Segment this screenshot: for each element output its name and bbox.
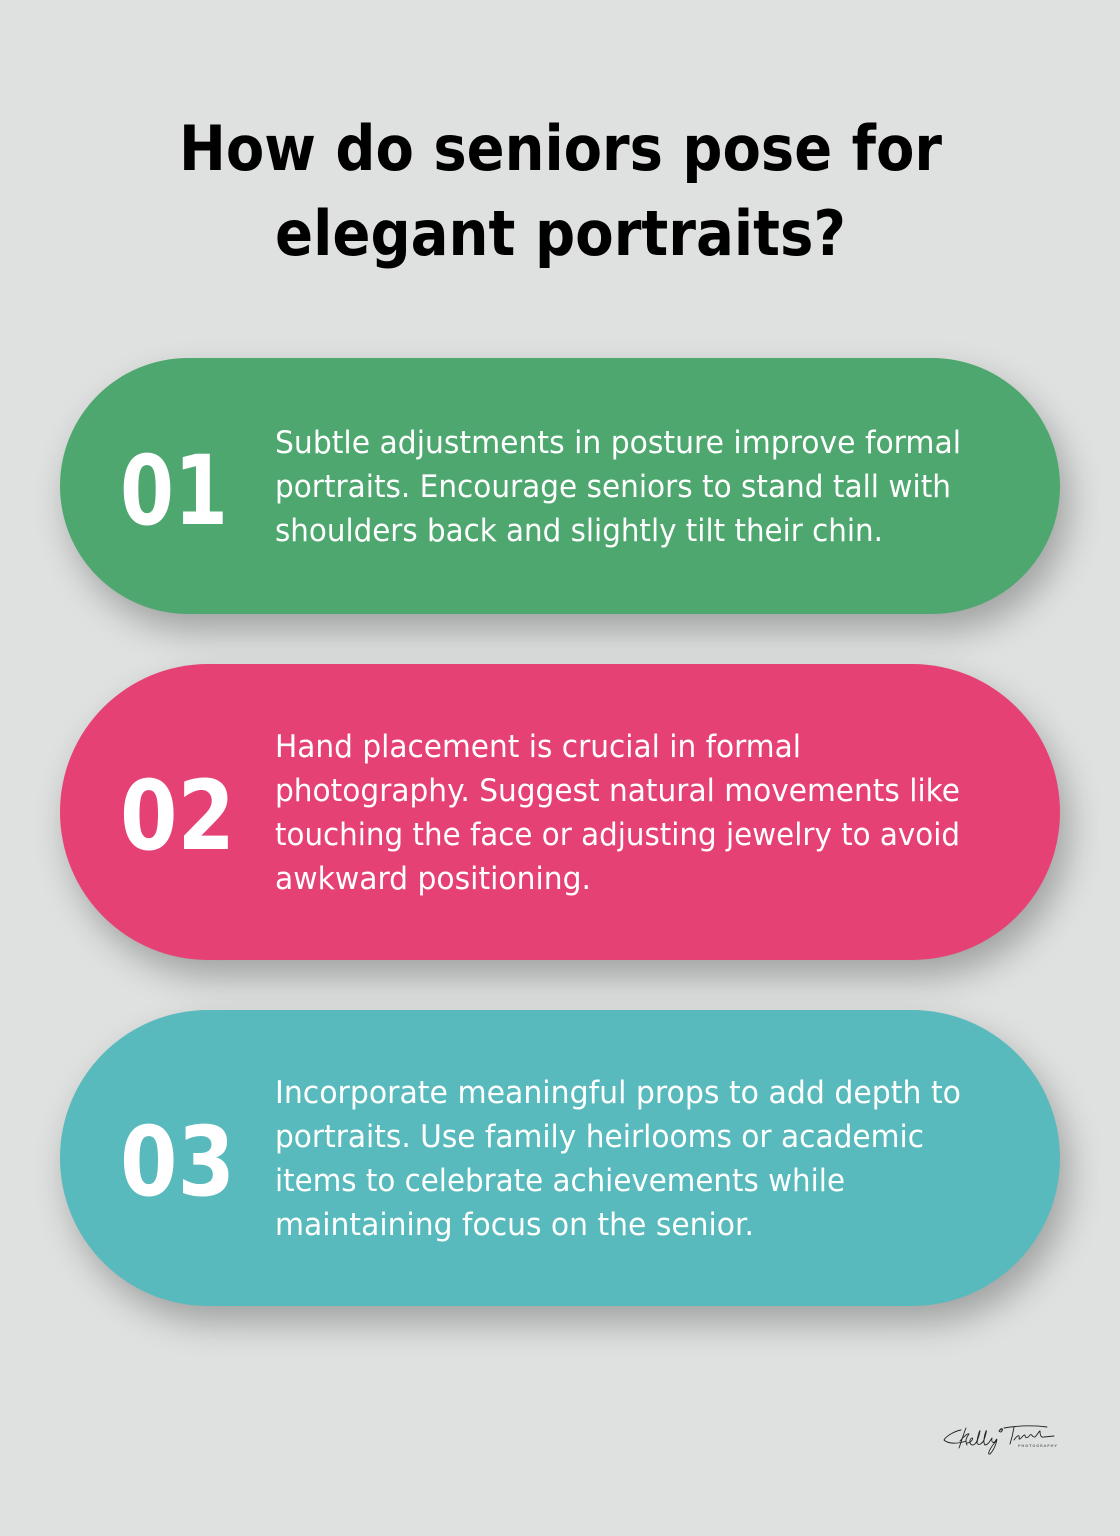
- panel: step 2 pill: [60, 664, 1060, 960]
- title: [179, 112, 942, 270]
- step 1 text: [275, 425, 961, 549]
- step 2 text: Hand placement is crucial in formal: [275, 729, 801, 765]
- step 3 text: portraits. Use family heirlooms or academic: [275, 1119, 924, 1155]
- step 2 text: touching the face or adjusting jewelry to avoid: [275, 817, 960, 853]
- logo: Kelly Tareski signature: [944, 1426, 1058, 1454]
- title: elegant portraits?: [275, 197, 846, 270]
- logo: Kelly Tareski signature: PHOTOGRAPHY: [1018, 1444, 1058, 1448]
- step 3 number: 03: [120, 1106, 235, 1218]
- step 2 text: awkward positioning.: [275, 861, 591, 897]
- step 2 number: 02: [120, 760, 235, 872]
- step 3 text: items to celebrate achievements while: [275, 1163, 845, 1199]
- step 1 number: 01: [120, 435, 228, 547]
- panel: step 1 pill: [60, 358, 1060, 614]
- step 1 text: shoulders back and slightly tilt their chin.: [275, 513, 883, 549]
- step 1 text: portraits. Encourage seniors to stand tall with: [275, 469, 951, 505]
- panel: step 3 pill: [60, 1010, 1060, 1306]
- step 2 text: photography. Suggest natural movements like: [275, 773, 960, 809]
- title: How do seniors pose for: [179, 112, 942, 185]
- step 1 text: Subtle adjustments in posture improve formal: [275, 425, 961, 461]
- step 3 text: Incorporate meaningful props to add depth to: [275, 1075, 961, 1111]
- step 2 text: [275, 729, 960, 897]
- step 3 text: maintaining focus on the senior.: [275, 1207, 754, 1243]
- step 3 text: [275, 1075, 961, 1243]
